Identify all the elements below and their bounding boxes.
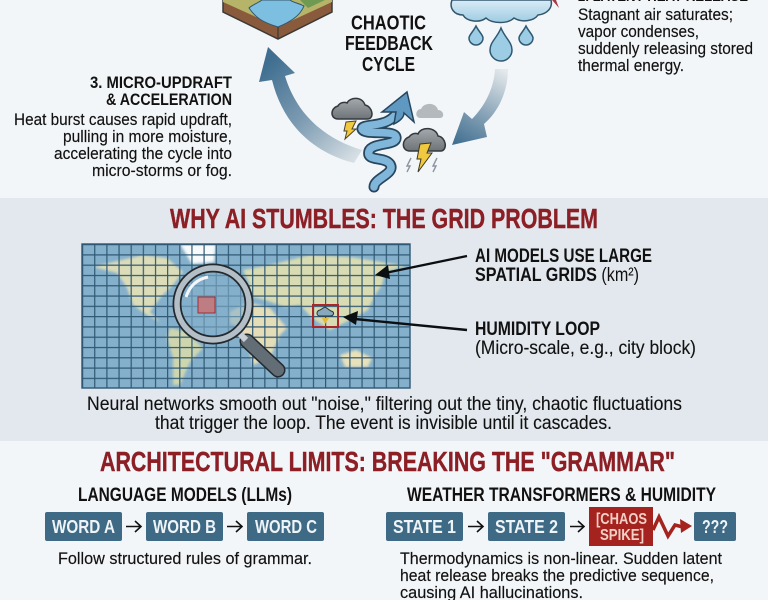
text block: micro-updraft: accelerating the cycle into <box>54 145 232 163</box>
box: word c <box>247 512 324 541</box>
box: chaos spike: SPIKE] <box>600 527 644 544</box>
caption: Neural networks smooth out "noise," filtering out the tiny, chaotic fluctuations <box>87 394 682 415</box>
icon: rain cloud with drops <box>451 0 559 61</box>
text block: latent heat release: Stagnant air saturates; <box>578 6 733 24</box>
arrow: a to b <box>126 521 141 532</box>
arrow: right curved <box>452 69 508 145</box>
panel: architectural limits <box>45 446 736 600</box>
text block: latent heat release: suddenly releasing stored <box>578 40 753 58</box>
box: state 1: STATE 1 <box>393 516 456 537</box>
text block: micro-updraft <box>14 73 233 180</box>
cycle title: FEEDBACK <box>345 32 433 55</box>
box: unknown <box>694 512 736 541</box>
icon: storm cloud left <box>332 98 372 139</box>
label: spatial grids: SPATIAL GRIDS (km²) <box>475 265 639 286</box>
arrow: left curved <box>259 47 362 163</box>
icon: terrain block <box>223 0 332 39</box>
box: unknown: ??? <box>702 516 728 537</box>
box: word c: WORD C <box>255 516 317 537</box>
label: spatial grids <box>475 246 652 286</box>
text block: micro-updraft: 3. MICRO-UPDRAFT <box>90 73 233 92</box>
label: humidity loop: (Micro-scale, e.g., city block) <box>475 338 696 359</box>
arrow: to humidity loop <box>343 311 467 330</box>
icon: magnifying glass <box>177 268 278 370</box>
column: language models: LANGUAGE MODELS (LLMs) <box>78 485 292 506</box>
icon: storm cloud right with bolt <box>403 129 445 172</box>
text block: micro-updraft: micro-storms or fog. <box>92 162 232 180</box>
box: state 2 <box>488 512 565 541</box>
arrow: to spatial grids <box>375 256 467 279</box>
text block: thermodynamics: heat release breaks the predictive sequence, <box>400 567 714 585</box>
cycle title <box>345 12 433 76</box>
text block: micro-updraft: & ACCELERATION <box>106 90 232 109</box>
map with grid <box>82 244 410 388</box>
box: word a <box>45 512 122 541</box>
text block: latent heat release: thermal energy. <box>578 57 684 75</box>
text block: latent heat release: vapor condenses, <box>578 23 699 41</box>
icon: spiral updraft arrow <box>362 92 414 187</box>
text block: thermodynamics <box>400 550 722 600</box>
heading: grid problem: WHY AI STUMBLES: THE GRID PROBLEM <box>170 203 598 234</box>
arrow: state 2 to spike <box>570 521 584 532</box>
label: spatial grids: AI MODELS USE LARGE <box>475 246 652 267</box>
arrow: zigzag spike <box>653 517 692 536</box>
cycle title: CHAOTIC <box>351 12 426 34</box>
box: state 1 <box>386 512 463 541</box>
text block: thermodynamics: Thermodynamics is non-linear. Sudden latent <box>400 550 722 568</box>
text block: micro-updraft: Heat burst causes rapid updraft, <box>14 111 232 129</box>
column: language models: Follow structured rules of grammar. <box>58 550 312 568</box>
box: word b: WORD B <box>153 516 216 537</box>
column: language models <box>45 485 324 568</box>
column: weather transformers <box>386 485 736 600</box>
box: state 2: STATE 2 <box>495 516 558 537</box>
arrow: state 1 to 2 <box>468 521 483 532</box>
caption <box>87 394 682 434</box>
text block: micro-updraft: pulling in more moisture, <box>63 128 232 146</box>
box: chaos spike: [CHAOS <box>596 511 647 528</box>
label: humidity loop: HUMIDITY LOOP <box>475 319 600 340</box>
arrow: b to c <box>227 521 242 532</box>
box: word a: WORD A <box>52 516 115 537</box>
icon: humidity loop marker <box>313 305 338 327</box>
caption: that trigger the loop. The event is invisible until it cascades. <box>155 413 612 434</box>
text block: latent heat release <box>578 0 753 75</box>
box: word b <box>146 512 223 541</box>
panel: grid problem <box>0 198 768 441</box>
panel: chaotic feedback cycle <box>14 0 753 187</box>
box: chaos spike <box>589 507 653 546</box>
cycle title: CYCLE <box>362 53 415 76</box>
icon: faded gray cloud <box>416 104 443 118</box>
label: humidity loop <box>475 319 696 359</box>
